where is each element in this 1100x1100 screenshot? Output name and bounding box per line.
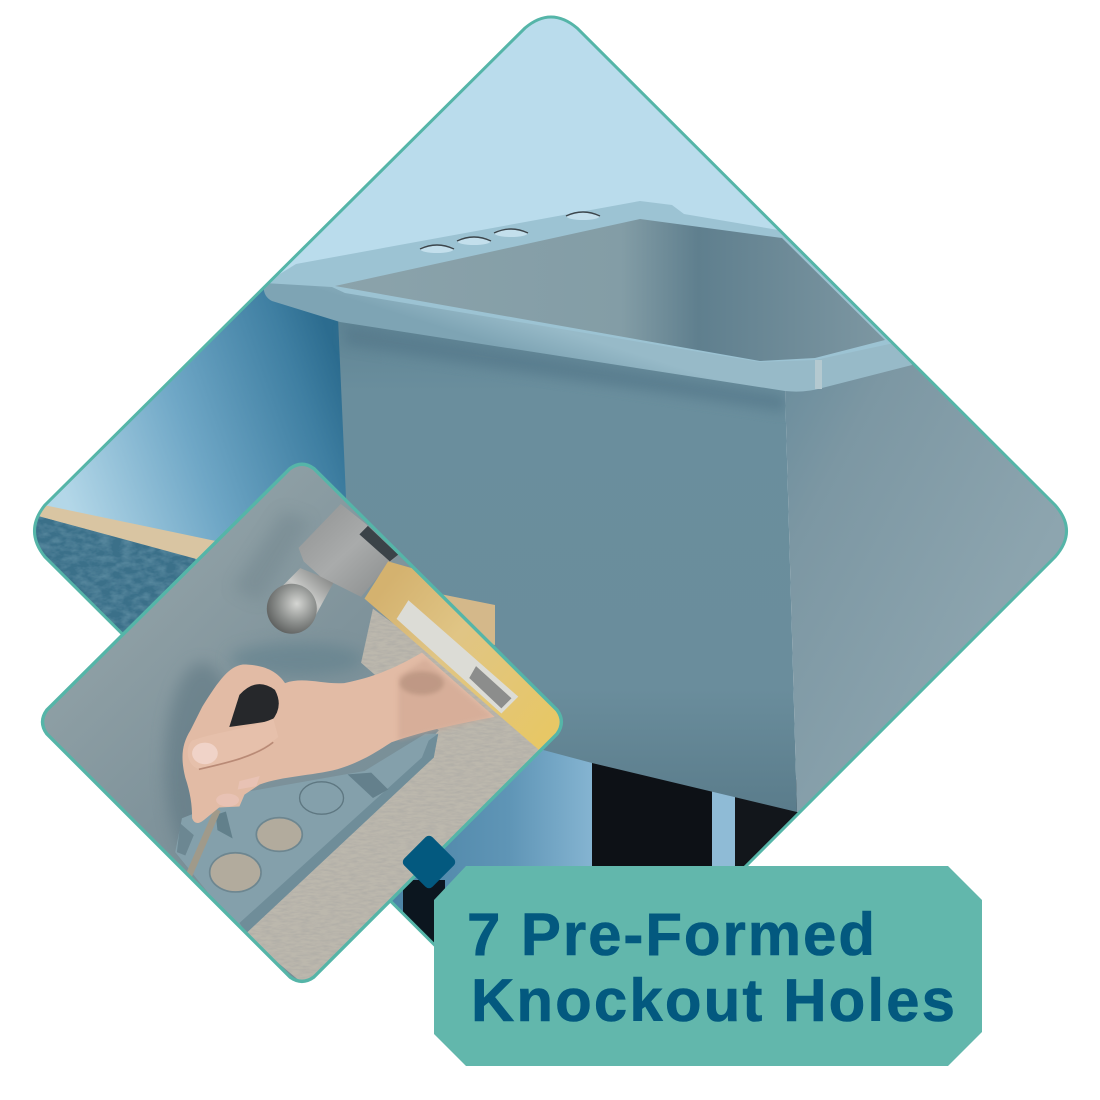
- sink rear rim: [270, 201, 892, 362]
- hand and arm: [182, 653, 495, 823]
- screwdriver handle: [229, 684, 279, 727]
- sink basin interior: [335, 219, 885, 361]
- caption box: [434, 866, 982, 1066]
- icon: small blue diamond accent: [401, 834, 457, 890]
- panel: small diamond photo of hammer and screwdriver: [40, 460, 570, 990]
- sink legs and pipes: [403, 763, 798, 942]
- left wall: [46, 290, 346, 560]
- wood block behind hammer: [440, 594, 495, 645]
- sink body right side: [785, 364, 1065, 812]
- blue towel: [36, 516, 196, 632]
- gray wood surface: [248, 609, 539, 980]
- knockout holes on sink deck: [420, 212, 600, 253]
- tray with knockout holes: [175, 734, 438, 933]
- lower wall: [392, 750, 592, 912]
- screwdriver shaft: [189, 810, 217, 876]
- tub background: [44, 466, 439, 979]
- wood shelf: [40, 506, 215, 559]
- sink front rim: [264, 283, 912, 392]
- upper wall: [279, 18, 777, 274]
- thumb: [263, 718, 274, 722]
- caption heading line 2: Knockout Holes: [471, 967, 955, 1034]
- caption heading line 1: 7 Pre-Formed: [467, 901, 875, 968]
- sink body front: [338, 318, 797, 812]
- hammer: [267, 504, 570, 754]
